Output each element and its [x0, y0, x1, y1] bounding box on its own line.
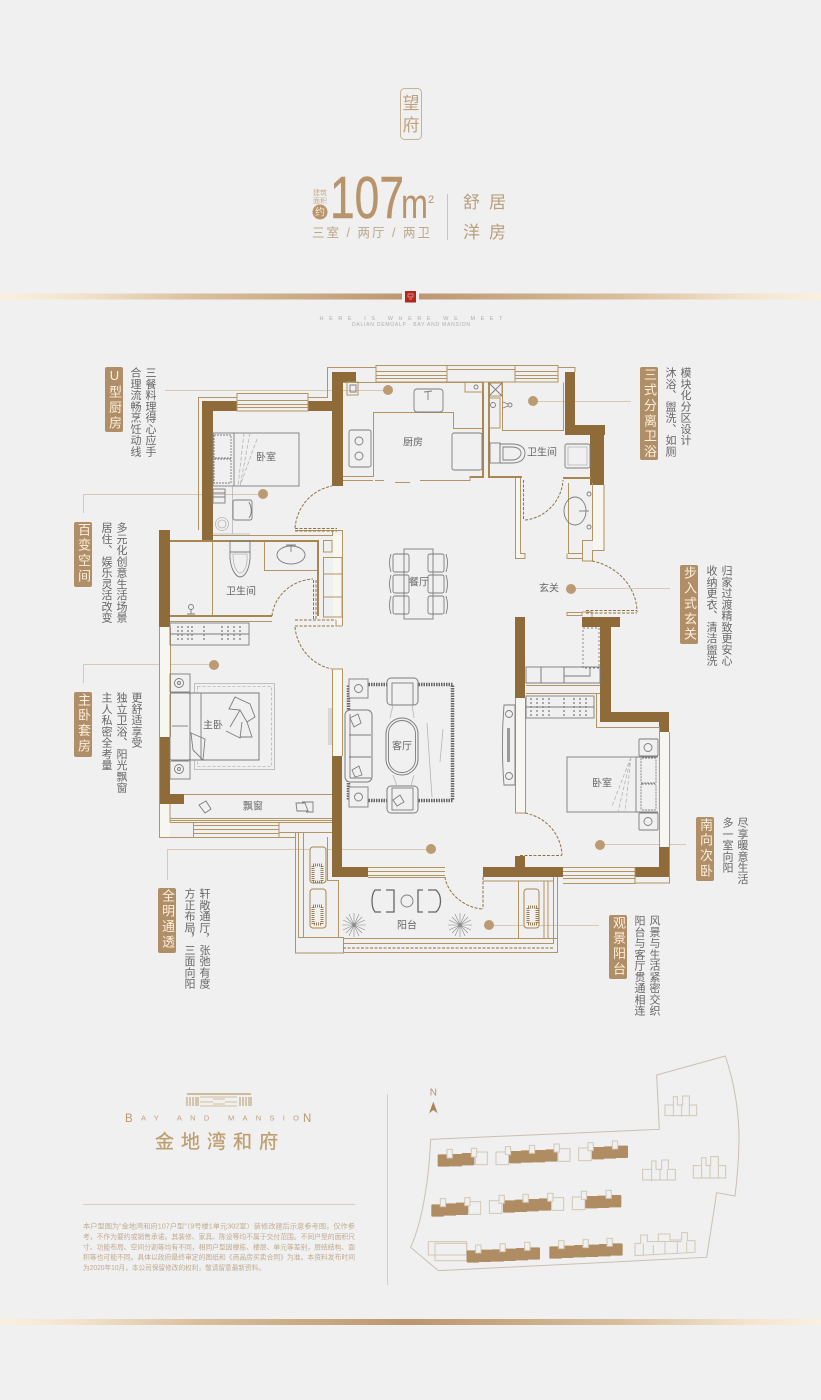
slogan: english: DALIAN DEMOALP · BAY AND MANSION [352, 322, 470, 328]
north arrow [429, 1088, 438, 1113]
callout: 三式分离卫浴: 沐浴、盥洗、如厕 [664, 367, 676, 457]
callout: 百变空间: 百变空间 [76, 523, 91, 584]
tv unit and south-east bedroom furniture [502, 696, 658, 830]
callout: 主卧套房: 更舒适享受 [130, 692, 142, 748]
room label: 阳台: 阳台 [397, 918, 417, 932]
site plan [411, 1056, 739, 1271]
disclaimer: 寸、功能布局、空间分割等均有不同，相同户型因楼栋、楼层、单元等差别，层结结构、面 [83, 1242, 355, 1252]
disclaimer: 考，不作为要约或销售承诺。其装修、家具、陈设等均不属于交付范围。不同户型的面积尺 [83, 1232, 355, 1241]
brand logo: 金地湾和府: B [125, 1113, 133, 1125]
callout: 主卧套房: 主人私密全考量 [100, 692, 112, 771]
badge: 望府: 望 [402, 94, 420, 113]
area heading: 107 m²: 2 [428, 194, 434, 206]
callout: 主卧套房: 主卧套房 [76, 693, 91, 754]
callout: 百变空间 [74, 522, 128, 623]
room label: 卫生间 north-east: 卫生间 [527, 446, 557, 458]
slogan: 舒居洋房: 房 [489, 223, 506, 242]
brand logo: 金地湾和府: AY AND MANSIO [141, 1114, 299, 1122]
divider band with red seal [0, 291, 821, 302]
callout: 观景阳台: 观景阳台 [611, 916, 626, 977]
callout: 南向次卧: 多一室向阳 [721, 817, 733, 873]
master bathroom fixtures [187, 541, 305, 614]
slogan: english [320, 316, 503, 328]
callout: 步入式玄关: 步入式玄关 [682, 566, 697, 642]
vertical separator [386, 1094, 388, 1285]
room label: 卧室 south-east: 卧室 [592, 776, 612, 790]
slogan: 舒居洋房: 居 [489, 193, 506, 212]
disclaimer: 积等也可能不同。具体以政府最终审定的图纸和《商品房买卖合同》为准。本资料发布时间 [83, 1252, 355, 1262]
room label: 飘窗: 飘窗 [243, 800, 263, 812]
room label: 玄关: 玄关 [539, 582, 559, 594]
slogan: 舒居洋房: 洋 [463, 223, 480, 242]
callout: 全明通透: 全明通透 [160, 889, 175, 950]
slogan: 舒居洋房: 舒 [463, 193, 480, 212]
room label: 客厅: 客厅 [392, 740, 412, 752]
area heading: 107 m²: 107 [330, 165, 404, 231]
light wall infill [160, 478, 669, 847]
subheading: room layout: 三室 / 两厅 / 两卫 [312, 225, 430, 240]
callout: U型厨房: U型厨房 [107, 368, 122, 431]
area heading: 107 m²: m [401, 180, 428, 227]
disclaimer [83, 1204, 355, 1272]
entry cabinets [526, 628, 600, 683]
callout: 主卧套房: 独立卫浴、阳光飘窗 [115, 692, 127, 793]
slogan: english: HERE IS WHERE WE MEET [320, 316, 503, 322]
living room furniture [345, 678, 452, 813]
room label: 主卧: 主卧 [203, 718, 223, 732]
room label: 卧室 north: 卧室 [256, 450, 276, 464]
area heading: 107 m²: 约 [315, 206, 325, 218]
north bedroom furniture [213, 433, 299, 534]
callout: 南向次卧 [696, 817, 748, 884]
brand logo: 金地湾和府 [125, 1094, 311, 1153]
callout: 观景阳台: 阳台与客厅贯通相连 [633, 915, 645, 1016]
thin partitions and windows [160, 366, 670, 953]
badge: 望府 [400, 88, 422, 140]
callout: U型厨房 [105, 367, 156, 457]
brand logo: 金地湾和府: 金地湾和府 [155, 1131, 285, 1153]
disclaimer: 为2020年10月，本公司保留修改的权利，敬请留意最新资料。 [83, 1263, 265, 1272]
master bedroom furniture [170, 623, 274, 779]
room label: 餐厅: 餐厅 [409, 576, 429, 588]
room label: 厨房: 厨房 [403, 436, 423, 448]
dining set [390, 549, 448, 619]
callout: 步入式玄关: 归家过渡精致更安心 [720, 565, 732, 666]
highlighted 107 units [431, 1146, 628, 1263]
structural walls [159, 372, 669, 877]
balcony furniture [310, 847, 539, 937]
callout: 全明通透: 方正布局，三面向阳 [183, 888, 195, 989]
callout: U型厨房: 三餐料理得心应手 [144, 367, 156, 457]
callout: 观景阳台: 风景与生活紧密交织 [648, 915, 660, 1016]
callout: U型厨房: 合理流畅烹饪动线 [129, 367, 141, 457]
slogan: 舒居洋房 [448, 193, 506, 242]
callout: 百变空间: 居住、娱乐灵活改变 [100, 522, 112, 623]
callout: 三式分离卫浴 [640, 367, 692, 460]
bay window cushions [199, 801, 313, 813]
building stair towers [440, 1141, 618, 1253]
unhighlighted buildings [428, 1096, 726, 1261]
floor plan [159, 366, 670, 953]
callout: 步入式玄关: 收纳更衣、清洁盥洗 [705, 565, 717, 666]
callout: 三式分离卫浴: 三式分离卫浴 [642, 368, 657, 460]
area heading: 107 m²: 面积 [313, 196, 327, 205]
disclaimer: 本户型图为“金地湾和府107户型”（9号楼1单元302室）装修改建后示意参考图，仅作参 [83, 1222, 355, 1230]
callout: 三式分离卫浴: 模块化分区设计 [679, 367, 691, 446]
callout: 南向次卧: 南向次卧 [698, 818, 713, 879]
callout: 步入式玄关 [680, 565, 732, 666]
kitchen fixtures [347, 382, 483, 470]
callout: 观景阳台 [609, 915, 660, 1016]
badge: 望府: 府 [402, 116, 420, 135]
room label: 卫生间 west: 卫生间 [226, 584, 256, 598]
site boundary [411, 1056, 739, 1271]
brand logo: 金地湾和府: N [303, 1113, 311, 1125]
callout leader lines and dots [84, 385, 686, 930]
callout: 南向次卧: 尽享暖意生活 [736, 817, 748, 884]
callout: 全明通透 [158, 888, 210, 989]
callout: 全明通透: 轩敞通厅，张弛有度 [198, 888, 210, 989]
area heading: 107 m²: 建筑 [313, 188, 327, 197]
callout: 百变空间: 多元化创意生活场景 [115, 522, 127, 623]
north arrow: N [430, 1088, 437, 1099]
three-part bathroom fixtures [489, 383, 591, 529]
footer band [0, 1319, 821, 1325]
callout: 主卧套房 [74, 692, 142, 793]
